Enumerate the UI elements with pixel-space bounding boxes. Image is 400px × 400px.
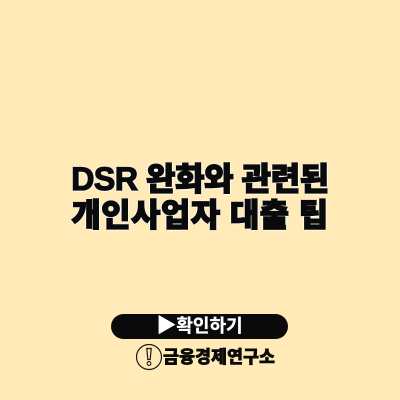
title: DSR 완화와 관련된	[71, 161, 329, 197]
button: 확인하기: ▶확인하기	[156, 315, 243, 337]
title	[70, 161, 329, 233]
icon: exclamation circle	[136, 344, 162, 370]
title: 개인사업자 대출 팁	[71, 197, 329, 233]
brand name: 금융경제연구소	[163, 347, 275, 367]
button: 확인하기	[111, 314, 288, 339]
